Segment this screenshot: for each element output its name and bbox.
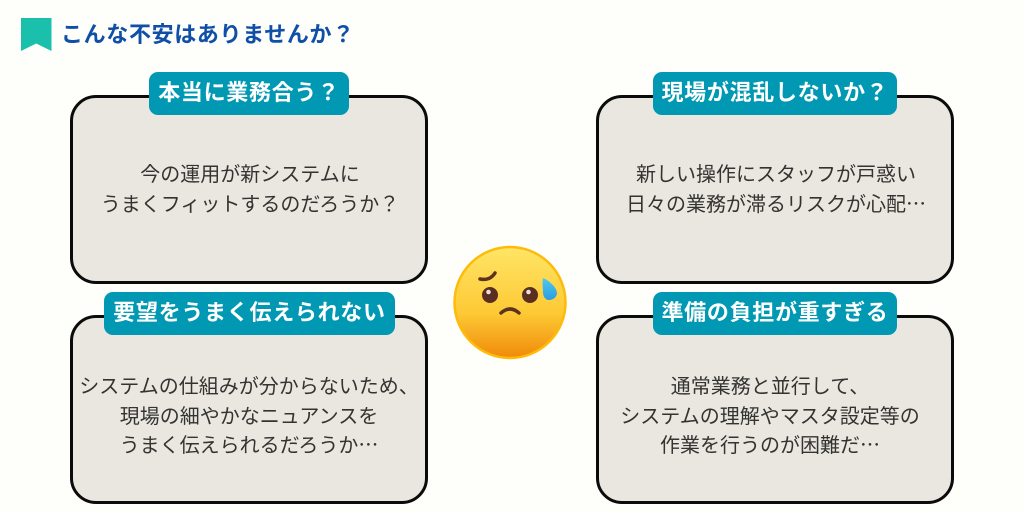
label: cannot convey requests: 要望をうまく伝えられない — [113, 300, 386, 325]
label: cannot convey requests — [104, 292, 395, 335]
text: fit with operations: 今の運用が新システムに — [140, 158, 360, 187]
text: preparation burden: システムの理解やマスタ設定等の — [620, 400, 920, 428]
label: site confusion — [653, 72, 897, 115]
panel: cannot convey requests — [70, 315, 428, 504]
label: preparation burden: 準備の負担が重すぎる — [661, 300, 888, 325]
text: preparation burden: 作業を行うのが困難だ… — [660, 429, 880, 458]
text: cannot convey requests: システムの仕組みが分からないため、 — [79, 370, 419, 399]
text: cannot convey requests: うまく伝えられるだろうか… — [120, 429, 378, 458]
label: site confusion: 現場が混乱しないか？ — [661, 80, 888, 105]
panel: fit with operations — [70, 95, 428, 284]
text: cannot convey requests: 現場の細やかなニュアンスを — [120, 400, 378, 428]
title: こんな不安はありませんか？ — [61, 22, 355, 47]
icon: worried face emoji — [453, 246, 567, 360]
text: preparation burden — [620, 370, 920, 458]
text: preparation burden: 通常業務と並行して、 — [671, 370, 869, 399]
panel: preparation burden — [596, 315, 954, 504]
label: fit with operations — [149, 72, 349, 115]
icon: bookmark — [21, 18, 52, 51]
text: site confusion: 新しい操作にスタッフが戸惑い — [636, 158, 916, 187]
panel: site confusion — [596, 95, 954, 284]
text: cannot convey requests — [79, 370, 419, 458]
label: fit with operations: 本当に業務合う？ — [158, 80, 340, 105]
text: fit with operations — [101, 158, 399, 216]
text: site confusion — [626, 158, 926, 216]
text: site confusion: 日々の業務が滞るリスクが心配… — [626, 188, 926, 216]
text: fit with operations: うまくフィットするのだろうか？ — [101, 188, 399, 216]
label: preparation burden — [653, 292, 897, 335]
